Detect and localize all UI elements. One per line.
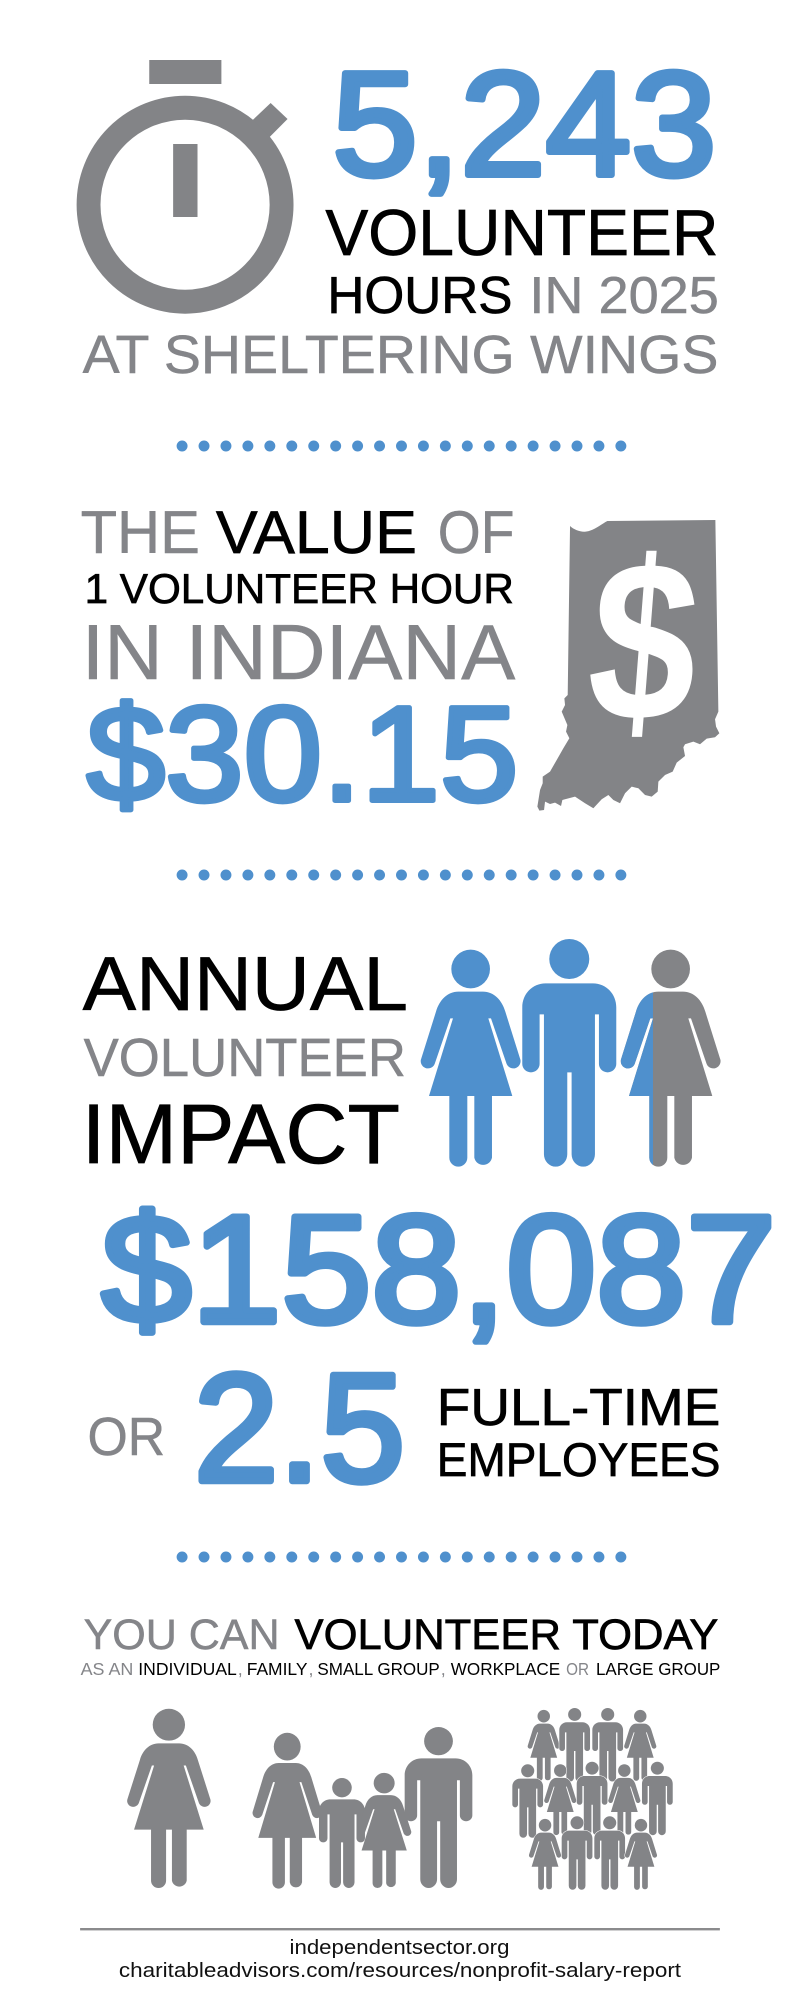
text: group types: ,: [441, 1659, 446, 1679]
source: charitableadvisors.com: charitableadvisors.com/resources/nonprofit-salary-report: [119, 1959, 681, 1982]
text: HOURS IN 2025: HOURS: [327, 266, 512, 324]
text: THE VALUE OF: VALUE: [216, 499, 417, 566]
panel: value of one hour: [81, 499, 719, 830]
divider dots: [182, 870, 622, 880]
text: EMPLOYEES: EMPLOYEES: [437, 1434, 720, 1486]
text: ANNUAL: ANNUAL: [83, 942, 408, 1027]
heading: you can volunteer today: VOLUNTEER TODAY: [295, 1611, 718, 1659]
text: group types: WORKPLACE: [451, 1659, 560, 1679]
text: group types: INDIVIDUAL: [138, 1659, 237, 1679]
icon: partly filled woman: [621, 950, 721, 1167]
text: THE VALUE OF: THE: [81, 499, 200, 566]
text: HOURS IN 2025: [327, 266, 719, 324]
number: $158,087: $158,087: [101, 1185, 776, 1355]
number: 5,243: 5,243: [332, 42, 716, 207]
heading: you can volunteer today: YOU CAN: [84, 1611, 280, 1659]
number: 2.5: 2.5: [194, 1342, 405, 1514]
footer sources: [80, 1928, 720, 1982]
text: THE VALUE OF: [81, 499, 514, 566]
heading: you can volunteer today: [84, 1611, 718, 1659]
source: independentsector.org: independentsector.org: [290, 1936, 509, 1959]
panel: volunteer hours: [83, 42, 719, 385]
text: group types: ,: [238, 1659, 243, 1679]
text: VOLUNTEER: VOLUNTEER: [325, 196, 718, 269]
icon: Indiana map with dollar sign: [537, 514, 719, 811]
text: group types: OR: [566, 1659, 589, 1679]
text: 1 VOLUNTEER HOUR: 1 VOLUNTEER HOUR: [85, 565, 514, 612]
number: $30.15: $30.15: [87, 678, 518, 830]
text: group types: SMALL GROUP: [317, 1659, 440, 1679]
panel: annual volunteer impact: [82, 939, 776, 1514]
icon: blue woman: [421, 950, 521, 1167]
icon: individual: [127, 1709, 211, 1888]
text: IMPACT: IMPACT: [82, 1087, 400, 1181]
text: FULL-TIME: FULL-TIME: [437, 1378, 720, 1436]
text: group types: AS AN: [81, 1659, 133, 1679]
text: group types: FAMILY: [247, 1659, 307, 1679]
icon: stopwatch: [89, 60, 288, 302]
icon: large group: [512, 1708, 673, 1890]
text: AT SHELTERING WINGS: AT SHELTERING WINGS: [83, 325, 718, 385]
icon: Indiana map with dollar sign: $: [580, 514, 708, 769]
icon: family: [253, 1727, 472, 1889]
text: group types: [81, 1659, 720, 1679]
text: OR: OR: [88, 1407, 165, 1467]
divider dots: [182, 440, 622, 452]
text: VOLUNTEER: VOLUNTEER: [84, 1028, 406, 1088]
text: group types: LARGE GROUP: [596, 1659, 720, 1679]
text: IN INDIANA: IN INDIANA: [82, 610, 516, 696]
divider dots: [182, 1552, 622, 1562]
panel: you can volunteer today: [81, 1611, 720, 1890]
text: group types: ,: [308, 1659, 313, 1679]
text: THE VALUE OF: OF: [438, 499, 514, 566]
icon: blue man: [522, 939, 616, 1167]
text: HOURS IN 2025: IN 2025: [529, 266, 719, 324]
